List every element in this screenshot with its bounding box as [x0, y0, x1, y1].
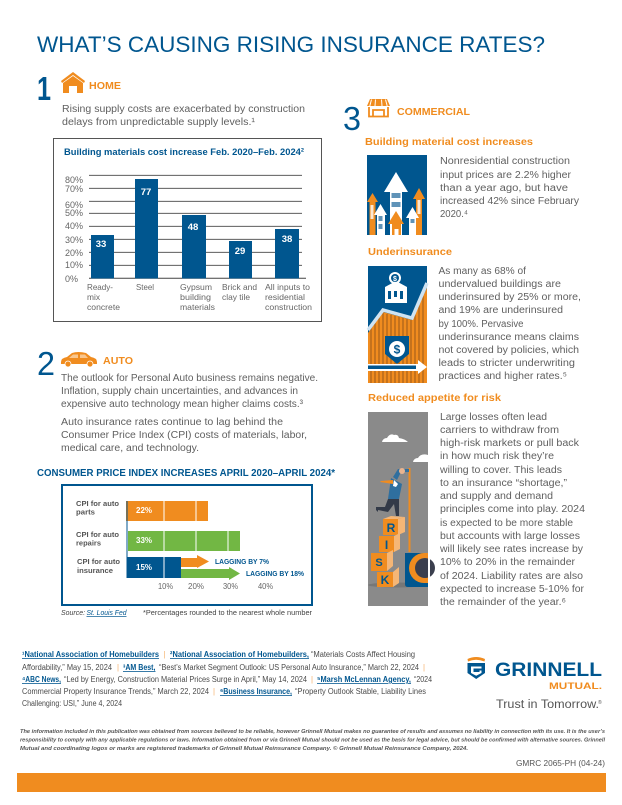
chart source and note: Source: [61, 610, 85, 617]
logo: Grinnell Mutual [468, 657, 602, 711]
bar values [96, 187, 292, 257]
paragraph: to an insurance “shortage,” [440, 478, 567, 489]
lag labels: LAGGING BY 18% [246, 569, 304, 578]
footnote references: “2024 [414, 675, 433, 684]
footnote references: ⁵Marsh McLennan Agency, [317, 675, 411, 684]
footnote references: Commercial Property Insurance Trends,” March 22, 2024 [22, 687, 210, 696]
bars [91, 179, 299, 278]
lag labels [215, 557, 304, 578]
row labels [76, 499, 120, 575]
heading: auto: AUTO [103, 355, 133, 367]
section 3: commercial heading [343, 99, 471, 137]
legal disclaimer [20, 729, 606, 752]
illustration: rising chart with house and shield: $ [393, 276, 397, 283]
footnote references: “Led by Energy, Construction Material Prices Surge in April,” May 14, 2024 [64, 675, 308, 684]
bar values: 29 [235, 246, 245, 257]
icon: house [61, 72, 85, 93]
chart source and note: *Percentages rounded to the nearest whole number [143, 610, 313, 617]
footnote references: ⁶Business Insurance, [220, 687, 292, 696]
number 3: 3 [343, 100, 361, 137]
paragraph [440, 156, 579, 220]
paragraph: underinsurance means claims [438, 332, 579, 343]
footnote references: Challenging: USI,” June 4, 2024 [22, 699, 123, 708]
number 1: 1 [37, 70, 51, 107]
category labels: Ready- [87, 282, 113, 292]
paragraph: and supply and demand [440, 491, 553, 502]
bar values: 48 [188, 222, 198, 233]
row labels: insurance [77, 566, 113, 575]
footnote references: ³AM Best, [123, 663, 156, 672]
y axis labels: 0% [65, 274, 78, 284]
icon: car [61, 352, 97, 367]
bar values: 33 [96, 239, 106, 250]
form number: GMRC 2065-PH (04-24) [516, 758, 605, 768]
paragraph: by 100%. Pervasive [438, 319, 524, 330]
paragraph: not covered by policies, which [438, 345, 579, 356]
paragraph: 10% to 20% in the remainder [440, 557, 576, 568]
footnote references: Affordability,” May 15, 2024 [22, 663, 113, 672]
home intro text [62, 104, 305, 128]
x axis labels: 30% [223, 581, 239, 591]
footnote references: | [423, 663, 425, 672]
bar: auto insurance [127, 557, 181, 578]
illustration: rising chart with house and shield [368, 266, 427, 383]
paragraph: 2020.⁴ [440, 209, 468, 220]
y axis labels: 70% [65, 184, 83, 194]
row labels: CPI for auto [76, 499, 119, 508]
home intro text: Rising supply costs are exacerbated by construction [62, 104, 305, 115]
paragraph: Nonresidential construction [440, 156, 570, 167]
category labels: Gypsum [180, 282, 212, 292]
category labels: Steel [136, 282, 154, 292]
y axis labels: 50% [65, 208, 83, 218]
legal disclaimer: Mutual and coordinating logos or marks are registered trademarks of Grinnell Mutual Reinsurance Company. © Grinnell Mutual Reinsurance Company, 2024. [20, 745, 468, 752]
category labels: concrete [87, 302, 120, 312]
subheading: Building material cost increases [365, 137, 533, 148]
footnote references: ⁴ABC News, [22, 675, 61, 684]
paragraph: than a year ago, but have [440, 183, 568, 194]
category labels: Brick and [222, 282, 257, 292]
bar values [136, 506, 152, 572]
bar values: 33% [136, 536, 152, 545]
panel: building materials bar chart [54, 138, 322, 322]
paragraph: willing to cover. This leads [439, 465, 562, 476]
paragraph: undervalued buildings are [438, 279, 561, 290]
footnote references: “Property Outlook Stable, Liability Lines [295, 687, 426, 696]
tagline: Trust in Tomorrow. [496, 699, 599, 711]
footer orange bar [17, 773, 606, 792]
footnote references [22, 650, 433, 708]
paragraph: but accounts with large losses [440, 531, 580, 542]
bar values: 38 [282, 234, 292, 245]
footnote references: | [213, 687, 215, 696]
paragraph: high-risk markets or pull back [440, 438, 580, 449]
category labels: mix [87, 292, 101, 302]
paragraph: leads to stricter underwriting [438, 358, 575, 369]
subsection: building material cost increases [365, 137, 579, 235]
auto text: expensive auto technology mean higher claims costs.³ [61, 399, 304, 410]
x axis labels: 40% [258, 581, 274, 591]
paragraph: is expected to be more stable [440, 518, 573, 529]
footnote references: | [164, 650, 166, 659]
legal disclaimer: responsibility to comply with any applicable regulations or laws. Information obtained from or via Grinnell Mutual should not be used as the basis for legal advice, but should be confirmed with alternative sources. Grinnell [20, 738, 605, 744]
subheading: Reduced appetite for risk [368, 393, 501, 404]
bar: auto parts [126, 501, 208, 521]
y axis labels: 20% [65, 248, 83, 258]
logo: Grinnell Mutual: ® [598, 699, 602, 706]
auto text: medical care, and technology. [61, 443, 199, 454]
arrow: lagging by 7% [181, 555, 209, 568]
x axis labels [158, 581, 274, 591]
y axis labels: 60% [65, 200, 83, 210]
subsection: reduced appetite for risk [368, 393, 585, 608]
category labels: building [180, 292, 211, 302]
y axis labels: 10% [65, 260, 83, 270]
paragraph: of 2024. Liability rates are also [440, 571, 583, 582]
illustration: risk blocks and measuring tape: I [385, 538, 388, 552]
paragraph: input prices are 2.2% higher [440, 170, 572, 181]
illustration: risk blocks and measuring tape: S [375, 557, 383, 569]
paragraph: will likely see rates increase by [439, 544, 583, 555]
category labels: clay tile [222, 292, 250, 302]
paragraph: increased 42% since February [440, 196, 579, 207]
logo: Grinnell Mutual: MUTUAL. [549, 681, 602, 692]
paragraph [439, 412, 585, 608]
category labels: residential [265, 292, 305, 302]
title: WHAT’S CAUSING RISING INSURANCE RATES? [37, 32, 545, 57]
paragraph [438, 266, 581, 382]
footnote references: “Best’s Market Segment Outlook: US Personal Auto Insurance,” March 22, 2024 [159, 663, 420, 672]
bar values: 22% [136, 506, 152, 515]
CPI chart heading: CONSUMER PRICE INDEX INCREASES APRIL 2020–APRIL 2024* [37, 467, 336, 479]
section 1: home [37, 70, 305, 128]
category labels: materials [180, 302, 215, 312]
legal disclaimer: The information included in this publication was obtained from sources believed to be reliable, however Grinnell Mutual makes no guarantee of results and assumes no liability in connection with its use. It is the user’s [20, 729, 606, 735]
category labels: All inputs to [265, 282, 310, 292]
category labels [87, 282, 312, 312]
panel: CPI bar chart [62, 485, 312, 605]
home intro text: delays from unpredictable supply levels.¹ [62, 117, 256, 128]
paragraph: in how much risk they’re [440, 451, 554, 462]
footnote references: ²National Association of Homebuilders, [170, 650, 309, 659]
auto text [61, 373, 318, 454]
auto text: The outlook for Personal Auto business remains negative. [61, 373, 318, 384]
number 2: 2 [37, 345, 55, 382]
paragraph: carriers to withdraw from [440, 425, 559, 436]
paragraph: practices and higher rates.⁵ [438, 371, 567, 382]
paragraph: underinsured by 25% or more, [438, 292, 581, 303]
auto text: Inflation, supply chain uncertainties, and advances in [61, 386, 298, 397]
x axis labels: 10% [158, 581, 174, 591]
y axis labels: 40% [65, 221, 83, 231]
icon: storefront [367, 99, 390, 116]
footnote references: | [311, 675, 313, 684]
heading: commercial: COMMERCIAL [397, 106, 471, 118]
footnote references: | [117, 663, 119, 672]
paragraph: As many as 68% of [438, 266, 526, 277]
subsection: underinsurance [368, 247, 581, 383]
wordmark: GRINNELL [495, 660, 602, 681]
auto text: Auto insurance rates continue to lag behind the [61, 417, 283, 428]
illustration: rising chart with house and shield: $ [394, 342, 401, 356]
paragraph: and 19% are underinsured [438, 305, 563, 316]
chart source and note: St. Louis Fed [86, 610, 128, 617]
row labels: CPI for auto [77, 557, 120, 566]
paragraph: the remainder of the year.⁶ [440, 597, 566, 608]
y axis labels: 30% [65, 235, 83, 245]
x axis labels: 20% [188, 581, 205, 591]
illustration: risk blocks and measuring tape [368, 412, 435, 606]
y axis labels: 80% [65, 175, 83, 185]
subheading: Underinsurance [368, 247, 452, 258]
paragraph: principles come into play. 2024 [440, 504, 585, 515]
illustration: rising houses [367, 155, 427, 235]
row labels: repairs [76, 538, 101, 548]
bar values: 77 [141, 187, 151, 198]
chart title: Building materials cost increase Feb. 2020–Feb. 2024² [64, 147, 304, 158]
illustration: risk blocks and measuring tape: R [387, 521, 396, 535]
illustration: risk blocks and measuring tape: K [381, 573, 390, 587]
y axis labels [65, 175, 83, 284]
bar values: 15% [136, 563, 152, 572]
bar: auto repairs [128, 531, 240, 551]
auto text: Consumer Price Index (CPI) costs of materials, labor, [61, 430, 307, 441]
lag labels: LAGGING BY 7% [215, 557, 269, 566]
arrow: lagging by 18% [181, 567, 240, 580]
row labels: CPI for auto [76, 530, 119, 539]
footnote references: “Materials Costs Affect Housing [311, 650, 415, 659]
chart source and note [61, 610, 313, 617]
section 2: auto [37, 345, 318, 454]
paragraph: expected to increase 5-10% for [440, 584, 585, 595]
row labels: parts [76, 508, 95, 516]
heading: home: HOME [89, 80, 121, 92]
paragraph: Large losses often lead [440, 412, 547, 423]
footnote references: ¹National Association of Homebuilders [22, 650, 160, 659]
category labels: construction [265, 302, 312, 312]
icon: shield [468, 657, 485, 679]
